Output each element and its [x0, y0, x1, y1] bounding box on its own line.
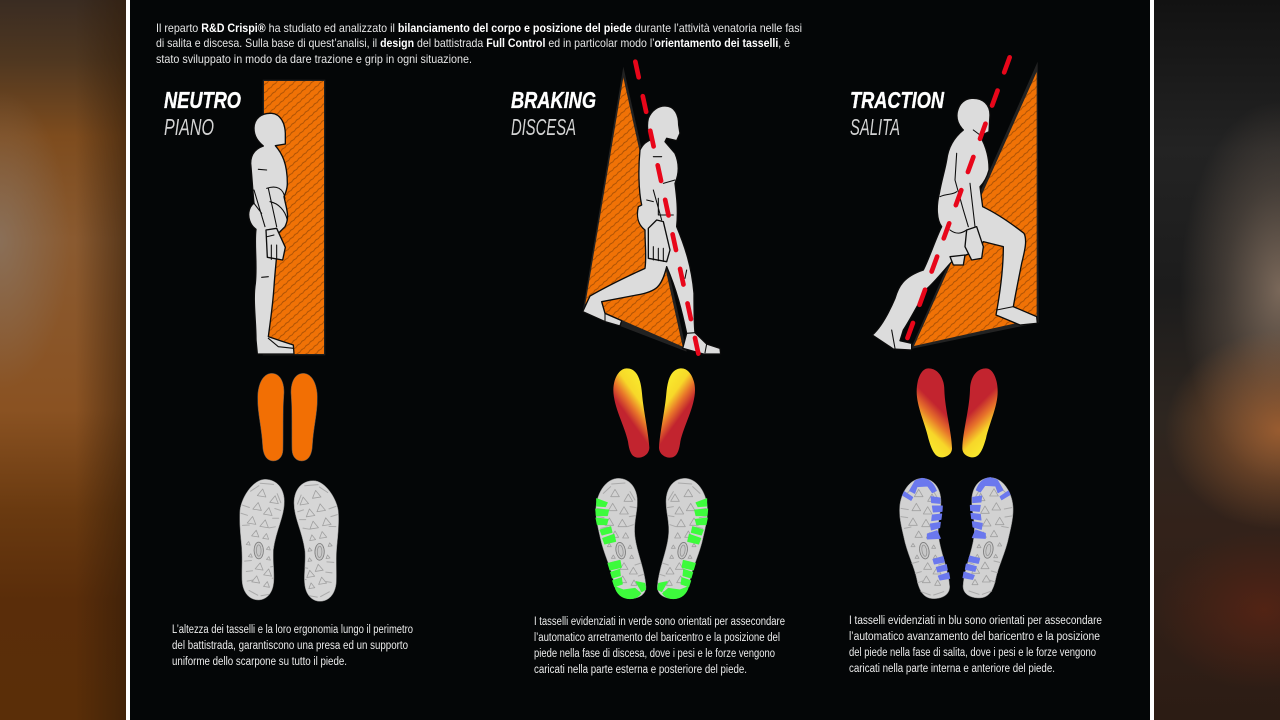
caption: traction [849, 615, 1102, 675]
background blur right [1154, 0, 1280, 720]
outsoles: green lugs [596, 478, 708, 599]
caption: traction: del piede nella fase di salita, dove i pesi e le forze vengono [849, 647, 1096, 659]
insoles: uniform orange [258, 373, 317, 461]
orange hatched wedge with climbing figure and balance line [872, 57, 1039, 350]
intro text block [156, 21, 802, 66]
heading: neutro: NEUTRO [164, 87, 241, 113]
caption: traction: l’automatico avanzamento del baricentro e la posizione [849, 631, 1100, 643]
caption: traction: caricati nella parte interna e anteriore del piede. [849, 663, 1055, 675]
orange hatched rectangle with standing figure [249, 80, 325, 355]
caption: braking: l’automatico arretramento del baricentro e la posizione del [534, 632, 780, 644]
intro text block: stato sviluppato in modo da dare trazione e grip in ogni situazione. [156, 52, 472, 66]
caption: neutro: del battistrada, garantiscono una presa ed un supporto [172, 640, 408, 652]
outsoles: neutral [229, 479, 350, 601]
insoles: traction pressure map [917, 368, 998, 457]
infographic content [156, 23, 1102, 676]
background blur left [0, 0, 126, 720]
insoles: braking pressure map [613, 368, 695, 458]
panel: braking [511, 62, 785, 676]
caption: braking: I tasselli evidenziati in verde sono orientati per assecondare [534, 616, 785, 628]
black central panel [130, 0, 1150, 720]
intro text block: di salita e discesa. Sulla base di quest’analisi, il design del battistrada Full Control ed in particolar modo l’orientamento dei tasselli, è [156, 36, 790, 50]
caption: braking [534, 616, 785, 676]
white border left [126, 0, 130, 720]
caption: neutro: uniforme dello scarpone su tutto il piede. [172, 656, 347, 668]
caption: neutro: L’altezza dei tasselli e la loro ergonomia lungo il perimetro [172, 624, 413, 636]
caption: braking: piede nella fase di discesa, dove i pesi e le forze vengono [534, 648, 775, 660]
heading: braking: BRAKING [511, 87, 596, 113]
caption: braking: caricati nella parte esterna e posteriore del piede. [534, 664, 747, 676]
heading: braking: DISCESA [511, 114, 576, 140]
white border right [1150, 0, 1154, 720]
orange hatched wedge with descending figure and balance line [583, 62, 721, 355]
heading: neutro [164, 87, 241, 140]
panel: traction [849, 57, 1102, 675]
intro text block: Il reparto R&D Crispi® ha studiato ed analizzato il bilanciamento del corpo e posizione del piede durante l’attività venatoria nelle fasi [156, 21, 802, 35]
heading: traction: SALITA [850, 114, 900, 140]
caption: neutro [172, 624, 413, 668]
outsoles: blue lugs [900, 478, 1013, 599]
caption: traction: I tasselli evidenziati in blu sono orientati per assecondare [849, 615, 1102, 627]
panel: neutro [164, 80, 413, 668]
heading: braking [511, 87, 596, 140]
heading: neutro: PIANO [164, 114, 214, 140]
heading: traction: TRACTION [850, 87, 944, 113]
heading: traction [850, 87, 944, 140]
